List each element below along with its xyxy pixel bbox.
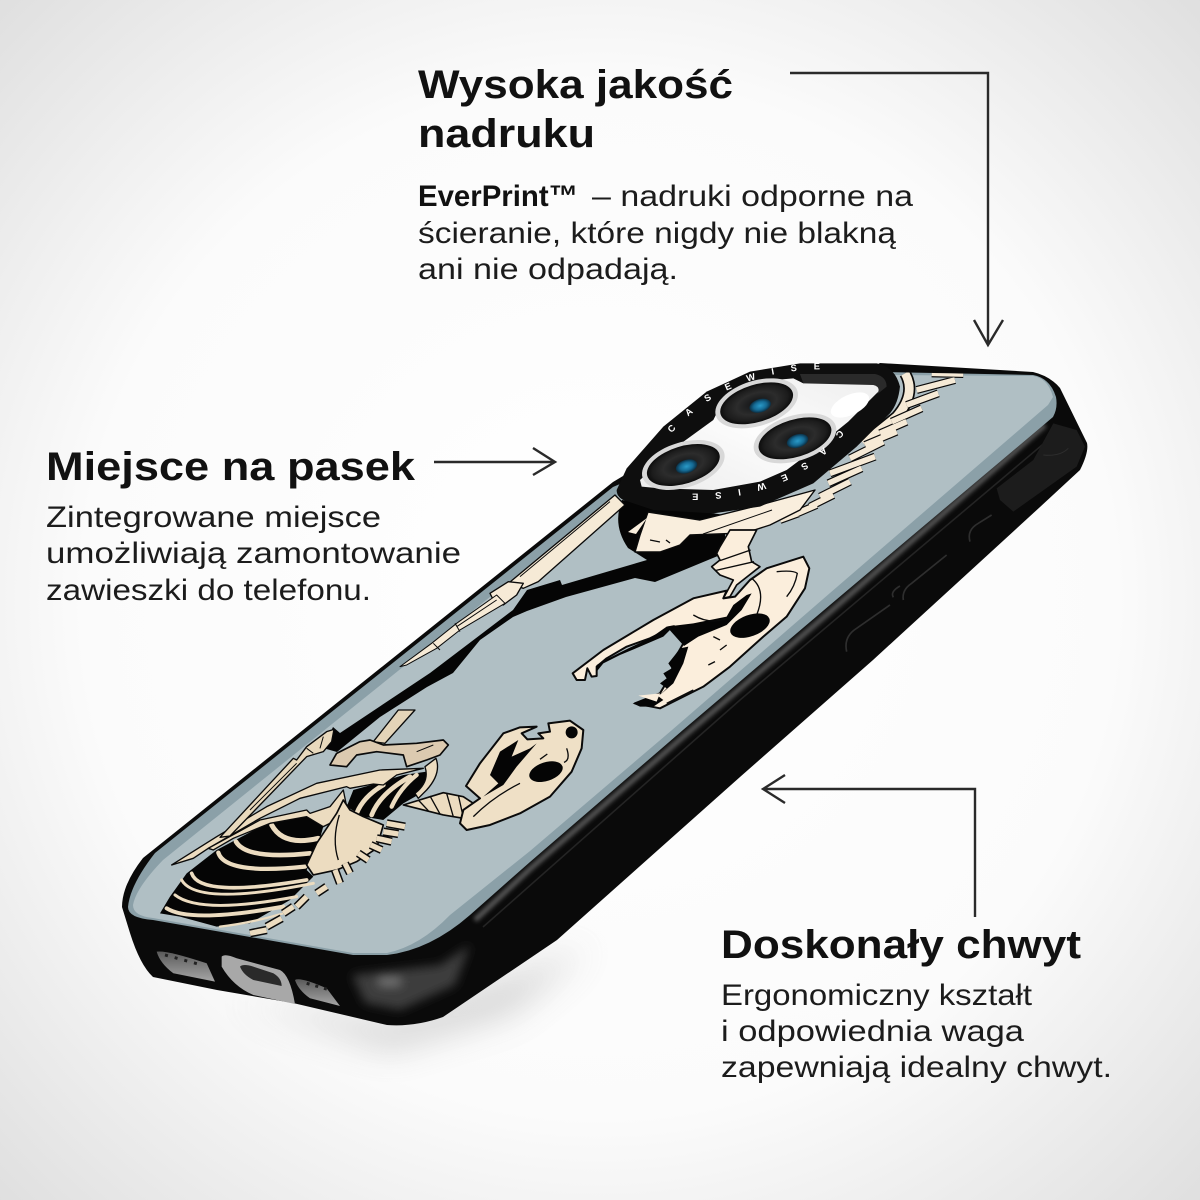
- lens: left: [636, 431, 731, 499]
- rib arcs: [167, 775, 417, 927]
- case body: [122, 363, 1087, 1025]
- text: print quality: ścieranie, które nigdy nie blakną: [418, 217, 896, 250]
- heading: strap slot: Miejsce na pasek: [46, 445, 416, 489]
- rib band: [208, 790, 347, 850]
- camera window: [640, 378, 879, 490]
- ring text: CASEWISE: [692, 431, 843, 500]
- rib cavity: [160, 817, 323, 927]
- side buttons: [846, 423, 1085, 652]
- text: grip: zapewniają idealny chwyt.: [721, 1051, 1112, 1084]
- upper wolf skull: [573, 530, 809, 708]
- ring text: CASEWISE: [668, 363, 820, 432]
- ring text: [668, 363, 843, 500]
- text: print quality: [418, 180, 913, 286]
- bottom ports: [157, 951, 340, 1006]
- upper ribs: [780, 373, 963, 520]
- edge glow: [475, 425, 1045, 920]
- rim line: [483, 440, 1048, 927]
- upper pelvis and spine: [628, 490, 815, 552]
- text: print quality: – nadruki odporne na: [592, 180, 913, 213]
- camera module: [616, 363, 900, 514]
- callout: print quality: [418, 63, 913, 286]
- arrow: print quality: [790, 73, 1003, 345]
- short ribs: [250, 823, 405, 933]
- forearm and paw: [220, 729, 334, 837]
- callout: strap slot: [46, 445, 461, 607]
- heading: print quality: Wysoka jakość: [418, 63, 733, 107]
- back face edge: [128, 372, 1057, 955]
- text: strap slot: umożliwiają zamontowanie: [46, 537, 461, 570]
- text: print quality: ani nie odpadają.: [418, 253, 678, 286]
- arrow: strap slot: [434, 448, 555, 475]
- text: grip: [721, 979, 1112, 1084]
- leg bone: [373, 710, 415, 743]
- skeleton artwork: [160, 373, 963, 933]
- upper neck: [712, 530, 760, 598]
- corner sheen: [352, 945, 470, 1010]
- arm shadow: [323, 500, 725, 752]
- lower ribcage: [160, 710, 448, 933]
- text: strap slot: zawieszki do telefonu.: [46, 574, 371, 607]
- phone case: [122, 363, 1088, 1026]
- arrow: grip: [763, 775, 975, 917]
- lower wolf skull: [460, 721, 583, 830]
- scapula: [172, 768, 423, 865]
- flash: [827, 387, 873, 423]
- text: strap slot: Zintegrowane miejsce: [46, 501, 381, 534]
- right shoulder bone: [415, 758, 438, 798]
- text: grip: Ergonomiczny kształt: [721, 979, 1033, 1012]
- back face: [133, 375, 1053, 953]
- lower neck vertebrae: [403, 793, 473, 818]
- text: strap slot: [46, 501, 461, 607]
- callout: grip: [721, 923, 1112, 1084]
- phone drop shadow: [235, 945, 590, 1048]
- heading: grip: Doskonały chwyt: [721, 923, 1081, 967]
- camera ring: [617, 363, 900, 513]
- hip bone: [307, 800, 383, 875]
- heading: print quality: [418, 63, 733, 156]
- lens: top: [709, 369, 804, 437]
- heading: print quality: nadruku: [418, 112, 595, 156]
- ring bevel: [800, 374, 887, 393]
- long arm bones: [400, 495, 625, 667]
- text: print quality: EverPrint™: [418, 180, 578, 213]
- lens: right: [748, 404, 842, 472]
- text: grip: i odpowiednia waga: [721, 1015, 1024, 1048]
